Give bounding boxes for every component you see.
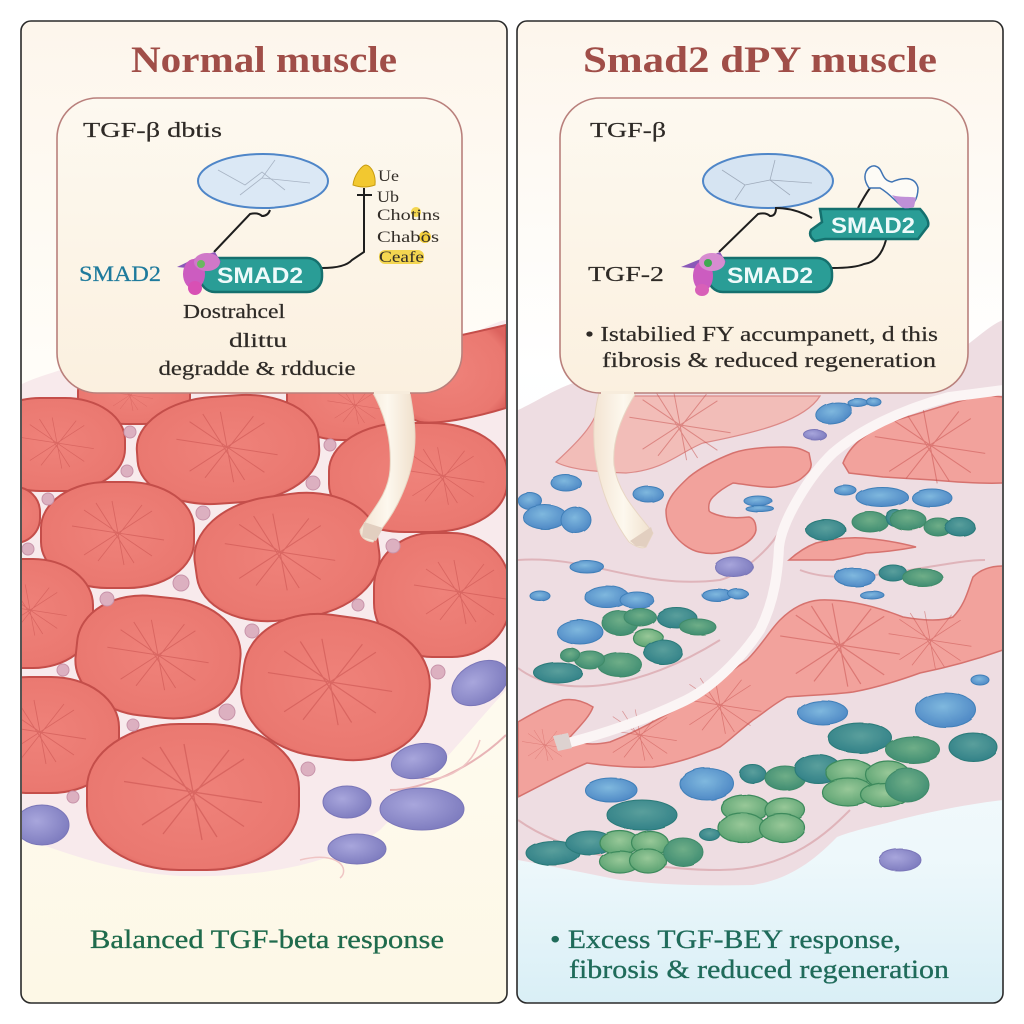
muscle fibers — [0, 325, 510, 870]
SMAD2 side label: SMAD2 — [79, 261, 161, 286]
ubiquitin labels: Ceafe — [379, 249, 424, 266]
SMAD2 pill upper — [810, 209, 928, 241]
tendon streak — [553, 390, 1003, 751]
icon: purple cup — [892, 195, 916, 208]
receptor oval — [198, 154, 328, 208]
SMAD2 pill lower — [708, 258, 832, 292]
muscle tissue cross-section — [0, 320, 516, 878]
ubiquitin labels: Ue — [378, 168, 399, 185]
receptor oval — [703, 154, 833, 208]
caption: Smad2 dPY result — [550, 925, 949, 984]
icon: purple receptor flower — [177, 252, 221, 295]
title: Normal muscle: Normal muscle — [131, 40, 397, 81]
caption: fibrosis & reduced regeneration — [602, 348, 937, 372]
caption: Smad2 dPY result: • Excess TGF-BEY response, — [550, 925, 901, 954]
blue and green cells: upper-right cluster — [804, 398, 975, 599]
pink fibers — [518, 390, 1003, 797]
caption: Smad2 dPY result: fibrosis & reduced regeneration — [569, 955, 949, 984]
ubiquitin labels — [377, 168, 440, 266]
callout: normal muscle signalling — [57, 98, 462, 542]
signalling connectors — [719, 188, 886, 268]
SMAD2 pill lower: SMAD2 — [727, 263, 813, 288]
TGF-2 side label: TGF-2 — [588, 262, 664, 286]
caption: • Istabilied FY accumpanett, d this — [585, 322, 938, 346]
purple cells — [15, 651, 516, 864]
caption: dlittu — [229, 330, 287, 352]
connective tissue nodes — [22, 426, 445, 803]
title: Smad2 dPY muscle: Smad2 dPY muscle — [583, 40, 937, 81]
icon: open loop on upper pill — [865, 166, 918, 208]
SMAD2 pill: SMAD2 — [217, 263, 303, 288]
signalling connectors — [214, 188, 372, 268]
ubiquitin labels: Ub — [377, 189, 399, 206]
SMAD2 pill — [200, 258, 322, 292]
label: TGF-beta: TGF-β dbtis — [83, 118, 222, 142]
ubiquitin labels: Chabôs — [377, 229, 439, 246]
label: TGF-beta: TGF-β — [590, 118, 666, 142]
fibrotic tissue — [518, 320, 1003, 885]
callout: Smad2 dPY signalling — [560, 98, 968, 548]
caption: degradde & rdducie — [158, 358, 356, 380]
icon: purple receptor flower — [681, 252, 726, 296]
blue and green cells: upper-left cluster — [518, 475, 774, 683]
caption — [585, 322, 938, 372]
icon: yellow ubiquitin — [353, 165, 375, 187]
caption: normal muscle result: Balanced TGF-beta response — [90, 925, 444, 954]
ubiquitin labels: Chotins — [377, 207, 440, 224]
panel: Smad2 dPY muscle — [517, 21, 1003, 1003]
caption: Dostrahcel — [183, 301, 286, 323]
blue and green cells: lower cluster — [526, 675, 997, 873]
panel: normal muscle — [0, 21, 516, 1003]
caption — [158, 301, 356, 380]
SMAD2 pill upper: SMAD2 — [831, 213, 915, 238]
